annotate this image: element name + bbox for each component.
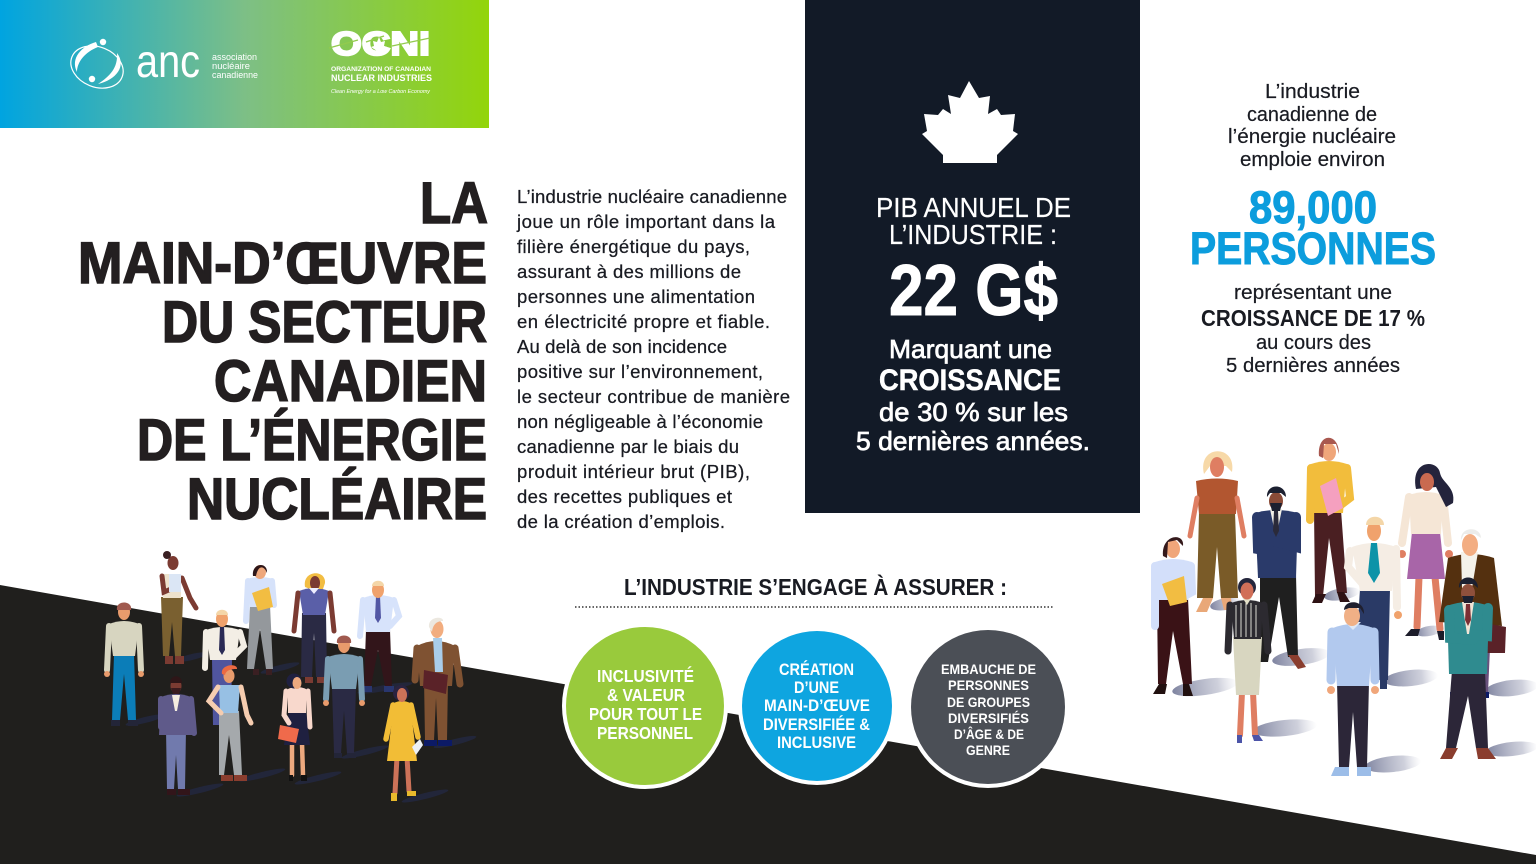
illustration: right group of workers [1153, 438, 1536, 776]
intro paragraph: non négligeable à l’économie [517, 411, 763, 432]
logo: anc [64, 35, 258, 96]
worker: white shirt, navy tie [205, 610, 244, 725]
icon: maple leaf [922, 81, 1018, 163]
intro paragraph: positive sur l’environnement, [517, 361, 763, 382]
title: CANADIEN [214, 349, 487, 414]
worker: olive trousers [161, 551, 196, 664]
intro paragraph: assurant à des millions de [517, 261, 741, 282]
employment stat: au cours des [1256, 332, 1371, 354]
GDP text: 22 G$ [889, 251, 1058, 331]
circle: diverse workforce: INCLUSIVE [777, 734, 856, 752]
logo: anc: nucléaire [212, 61, 250, 71]
circle: hiring: DIVERSIFIÉS [948, 710, 1029, 726]
circle: hiring: PERSONNES [948, 677, 1029, 693]
logo: OCNI: OCNI [331, 25, 430, 62]
worker: purple blazer [159, 676, 194, 795]
employment stat [1190, 81, 1436, 377]
intro paragraph: canadienne par le biais du [517, 436, 739, 457]
employment stat: emploie environ [1240, 149, 1385, 171]
GDP text: L’INDUSTRIE : [889, 219, 1057, 250]
intro paragraph: joue un rôle important dans la [516, 211, 776, 232]
employment stat: canadienne de [1247, 104, 1377, 126]
intro paragraph: en électricité propre et fiable. [517, 311, 770, 332]
circle: inclusivity: INCLUSIVITÉ [597, 665, 694, 686]
circle: hiring: DE GROUPES [947, 694, 1030, 710]
circle: inclusivity: & VALEUR [607, 685, 685, 705]
employment stat: 89,000 [1249, 182, 1377, 233]
intro paragraph: L’industrie nucléaire canadienne [517, 186, 787, 207]
intro paragraph: produit intérieur brut (PIB), [517, 461, 750, 482]
logo: anc: association [212, 52, 257, 62]
employment stat: l’énergie nucléaire [1228, 126, 1396, 148]
title: LA [420, 171, 488, 236]
worker: cream shirt, blue trousers [104, 602, 144, 726]
worker: white shirt, teal tie [1348, 517, 1402, 689]
intro paragraph: des recettes publiques et [517, 486, 732, 507]
worker: purple skirt [1398, 464, 1453, 640]
worker: blue top, blonde [294, 573, 334, 683]
employment stat: 5 dernières années [1226, 355, 1400, 377]
worker: yellow dress [386, 685, 423, 801]
worker: light shirt, yellow folder [1153, 537, 1193, 696]
worker: pink blouse, navy skirt [278, 674, 310, 781]
worker: navy suit [1255, 486, 1306, 669]
worker: tie, dark trousers [360, 581, 399, 692]
illustration: left group of workers [104, 551, 477, 805]
logo: OCNI [329, 25, 432, 95]
worker: light blue shirt, front [1327, 602, 1379, 776]
GDP text: Marquant une [889, 334, 1052, 364]
logo band [0, 0, 489, 128]
employment stat: L’industrie [1265, 81, 1360, 103]
worker: grey trousers, yellow folder [246, 565, 274, 675]
GDP text: CROISSANCE [879, 364, 1061, 397]
intro paragraph: Au delà de son incidence [517, 336, 727, 357]
GDP text: 5 dernières années. [856, 426, 1090, 456]
employment stat: CROISSANCE DE 17 % [1201, 305, 1425, 331]
worker: brown suit [415, 618, 460, 746]
worker: vest, grey trousers [209, 665, 251, 781]
worker: blonde, rust top [1190, 451, 1244, 612]
GDP text [856, 192, 1090, 456]
intro paragraph: filière énergétique du pays, [517, 236, 750, 257]
circle: diverse workforce: D’UNE [794, 679, 839, 697]
logo: OCNI: ORGANIZATION OF CANADIAN [331, 66, 431, 73]
logo: OCNI: Clean Energy for a Low Carbon Economy [331, 89, 431, 95]
intro paragraph: personnes une alimentation [517, 286, 755, 307]
circle: diverse workforce [738, 627, 896, 785]
title: MAIN-D’ŒUVRE [78, 231, 487, 296]
circle: hiring: D’ÂGE & DE [954, 725, 1024, 742]
commitment heading: L’INDUSTRIE S’ENGAGE À ASSURER : [624, 573, 1007, 600]
title: DU SECTEUR [162, 290, 487, 355]
GDP text: PIB ANNUEL DE [876, 192, 1071, 223]
logo: anc: anc [136, 35, 200, 87]
circle: inclusivity: POUR TOUT LE [589, 704, 702, 724]
intro paragraph: de la création d’emplois. [517, 511, 725, 532]
circle: hiring: EMBAUCHE DE [941, 661, 1036, 677]
worker: striped top [1228, 578, 1268, 743]
circle: hiring: GENRE [966, 742, 1010, 758]
circle: diverse workforce: CRÉATION [779, 660, 854, 679]
title: NUCLÉAIRE [187, 467, 487, 532]
worker: old man, brown coat [1439, 529, 1506, 698]
title: DE L’ÉNERGIE [137, 408, 487, 473]
intro paragraph: le secteur contribue de manière [517, 386, 790, 407]
circle: inclusivity [562, 623, 728, 789]
worker: steel-blue shirt [323, 636, 365, 758]
logo: anc: canadienne [212, 70, 258, 80]
circle: inclusivity: PERSONNEL [597, 723, 693, 743]
title [78, 171, 488, 532]
employment stat: représentant une [1234, 282, 1392, 304]
circle: hiring [907, 626, 1069, 788]
logo: OCNI: NUCLEAR INDUSTRIES [331, 73, 432, 84]
GDP text: de 30 % sur les [879, 397, 1068, 427]
employment stat: PERSONNES [1190, 223, 1436, 274]
worker: teal suit [1440, 578, 1496, 759]
worker: yellow blouse [1310, 438, 1350, 603]
panel: GDP [805, 0, 1140, 513]
black diagonal background [0, 585, 1536, 864]
intro paragraph [516, 186, 790, 532]
circle: diverse workforce: MAIN-D’ŒUVE [764, 697, 870, 715]
circle: diverse workforce: DIVERSIFIÉE & [763, 715, 870, 734]
